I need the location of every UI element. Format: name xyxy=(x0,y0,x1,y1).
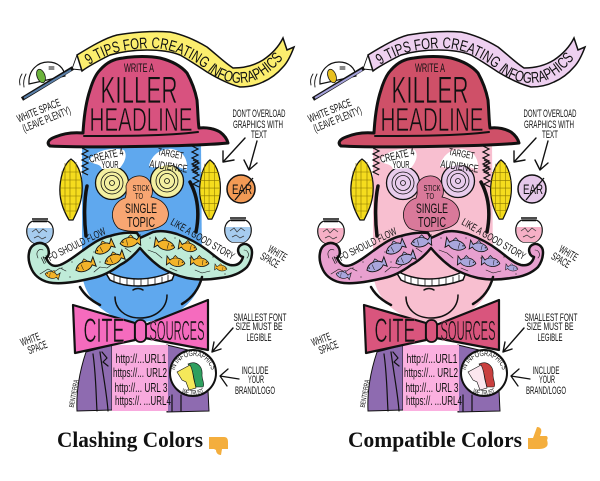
text: don't overload graphics: DON'T OVERLOAD xyxy=(232,108,286,120)
text: smallest font size: SMALLEST FONT xyxy=(234,312,287,324)
text: white space lower left: WHITE xyxy=(310,331,333,349)
icon: thumbs down xyxy=(209,437,228,455)
text: white space right: SPACE xyxy=(258,251,281,271)
shirt with urls: http://... URL 3 xyxy=(406,380,458,395)
icon: crossed out ear: EAR xyxy=(232,181,252,197)
arrow to logo xyxy=(511,369,530,386)
arrow to badge xyxy=(503,328,524,352)
icon: flying saucer xyxy=(311,55,373,99)
text: white space (leave plenty): (LEAVE PLENTY) xyxy=(312,105,364,135)
bow tie: cite sources: CITE xyxy=(84,312,124,350)
text: white space (leave plenty): WHITE SPACE xyxy=(306,97,353,125)
signature: BENTIERRA xyxy=(69,379,80,408)
chin xyxy=(406,288,458,318)
headline text: KILLER xyxy=(100,70,178,112)
eyes xyxy=(96,164,184,200)
shirt with urls: https://... URL2 xyxy=(113,365,167,380)
nose: stick to single topic: STICK xyxy=(132,184,150,193)
text: smallest font size xyxy=(234,312,287,344)
speech labels on forehead: AUDIENCE xyxy=(440,158,479,176)
text: white space (leave plenty) xyxy=(15,95,73,136)
arrows to ear xyxy=(223,138,257,170)
text: white space lower left: SPACE xyxy=(317,339,340,357)
text: don't overload graphics xyxy=(232,108,286,141)
text: don't overload graphics: TEXT xyxy=(251,129,267,141)
nose: stick to single topic: TO xyxy=(135,192,143,201)
text: don't overload graphics: TEXT xyxy=(542,129,558,141)
headline text: WRITE A xyxy=(124,61,154,75)
badge: in infographics we trust: WE TRUST xyxy=(474,388,494,395)
hat xyxy=(48,56,228,147)
caption: clashing colors: Clashing Colors xyxy=(57,427,203,452)
smile xyxy=(395,270,467,286)
nose: stick to single topic: SINGLE xyxy=(125,200,157,216)
text: include your brand/logo: YOUR xyxy=(539,374,555,386)
jaw outline xyxy=(371,277,493,305)
text: smallest font size: LEGIBLE xyxy=(538,332,562,344)
text: info should flow like a good story: INFO SHOULD FLOW xyxy=(331,226,399,267)
shirt with urls: https://. ...URL4 xyxy=(115,393,171,408)
text: smallest font size xyxy=(524,312,578,344)
headline text xyxy=(90,61,192,138)
text: info should flow like a good story: LIKE A GOOD STORY xyxy=(168,216,237,263)
text: info should flow like a good story xyxy=(331,216,528,267)
headline text: WRITE A xyxy=(415,61,445,75)
icon: fishbowls xyxy=(27,218,251,243)
badge: in infographics we trust xyxy=(460,349,508,397)
jacket xyxy=(77,345,209,412)
text: smallest font size: SIZE MUST BE xyxy=(236,321,282,333)
icon: corn ears xyxy=(60,159,220,220)
icon: crossed out ear xyxy=(227,175,255,203)
speech labels on forehead: CREATE 4 xyxy=(88,146,125,166)
speech labels on forehead: TARGET xyxy=(448,147,475,162)
jacket xyxy=(368,345,500,412)
shirt with urls: http://... URL 3 xyxy=(114,380,168,395)
text: smallest font size: LEGIBLE xyxy=(246,332,272,344)
text: white space lower left: SPACE xyxy=(26,339,49,357)
text: include your brand/logo xyxy=(526,365,566,397)
text: info should flow like a good story: INFO SHOULD FLOW xyxy=(40,226,108,267)
panel: clashing colors figure: SOURCES xyxy=(150,315,204,346)
nose: stick to single topic: TOPIC xyxy=(418,214,446,231)
text: include your brand/logo: INCLUDE xyxy=(532,365,560,377)
headline text: HEADLINE xyxy=(90,101,192,138)
headline text: KILLER xyxy=(392,70,468,112)
text: include your brand/logo: BRAND/LOGO xyxy=(235,385,275,397)
hair and sideburns xyxy=(373,146,490,236)
bow tie: cite sources: CITE xyxy=(374,312,416,350)
text: include your brand/logo: BRAND/LOGO xyxy=(526,385,566,397)
arrows to ear xyxy=(514,138,548,170)
text: don't overload graphics: GRAPHICS WITH xyxy=(233,119,283,131)
hat xyxy=(339,56,519,147)
speech labels on forehead xyxy=(379,146,479,176)
nose: stick to single topic: TO xyxy=(426,192,434,201)
nose: stick to single topic: SINGLE xyxy=(416,200,448,216)
icon: flying saucer xyxy=(20,55,82,99)
shirt with urls: https://. ...URL4 xyxy=(406,393,462,408)
banner: 9 tips: 9 TIPS FOR CREATING INFOGRAPHICS xyxy=(84,37,282,83)
text: white space (leave plenty) xyxy=(306,95,364,136)
text: info should flow like a good story: LIKE A GOOD STORY xyxy=(459,216,528,263)
text: white space right: WHITE xyxy=(557,243,580,264)
arrow to logo xyxy=(220,369,239,386)
badge: in infographics we trust: IN INFOGRAPHICS xyxy=(171,351,214,370)
icon: periwinkle fish xyxy=(335,233,519,280)
text: don't overload graphics xyxy=(524,108,577,141)
hair and sideburns xyxy=(82,146,199,236)
signature: BENTIERRA xyxy=(360,379,371,408)
nose: stick to single topic: TOPIC xyxy=(127,214,155,231)
text: white space right: SPACE xyxy=(549,251,572,271)
smile xyxy=(104,270,176,286)
icon: crossed out ear xyxy=(518,175,546,203)
bow tie: cite sources xyxy=(73,300,208,353)
text: white space lower left xyxy=(19,330,49,358)
icon: goldfish xyxy=(44,233,228,280)
speech labels on forehead: YOUR xyxy=(392,160,410,171)
headline text: HEADLINE xyxy=(380,101,484,138)
text: white space right xyxy=(549,242,580,273)
jaw outline xyxy=(80,277,202,305)
headline text xyxy=(380,61,484,138)
speech labels on forehead: CREATE 4 xyxy=(379,146,416,166)
text: white space (leave plenty): (LEAVE PLENTY) xyxy=(21,105,73,135)
icon: thumbs up xyxy=(528,427,548,449)
panel: compatible colors figure xyxy=(306,30,586,412)
text: white space lower left: WHITE xyxy=(19,331,42,349)
bow tie: cite sources xyxy=(364,300,499,353)
icon: fishbowls xyxy=(318,218,542,243)
speech labels on forehead: TARGET xyxy=(157,147,184,162)
shirt with urls: https://... URL2 xyxy=(404,365,458,380)
icon: corn ears xyxy=(351,159,511,220)
head xyxy=(373,140,493,322)
shirt with urls: http://...URL1 xyxy=(406,351,458,366)
speech labels on forehead: AUDIENCE xyxy=(149,158,188,176)
shirt with urls xyxy=(403,345,462,411)
text: white space lower left xyxy=(310,330,340,358)
badge: in infographics we trust: WE TRUST xyxy=(182,388,204,395)
nose: stick to single topic: STICK xyxy=(424,184,441,193)
speech labels on forehead xyxy=(88,146,188,176)
icon: crossed out ear: EAR xyxy=(523,181,543,197)
speech labels on forehead: YOUR xyxy=(102,160,118,171)
text: white space right: WHITE xyxy=(266,243,289,264)
text: include your brand/logo: INCLUDE xyxy=(242,365,268,377)
text: white space (leave plenty): WHITE SPACE xyxy=(15,97,62,125)
mustache xyxy=(29,231,252,283)
badge: in infographics we trust: IN INFOGRAPHICS xyxy=(462,351,505,370)
panel: compatible colors figure: SOURCES xyxy=(440,315,496,346)
nose: stick to single topic xyxy=(112,176,168,231)
badge: in infographics we trust xyxy=(169,349,217,397)
shirt with urls: http://...URL1 xyxy=(116,351,166,366)
eyes xyxy=(386,164,474,200)
text: white space right xyxy=(258,242,289,273)
chin xyxy=(115,288,167,318)
text: include your brand/logo: YOUR xyxy=(248,374,264,386)
panel: clashing colors figure xyxy=(15,30,296,412)
nose: stick to single topic xyxy=(403,176,459,231)
caption: compatible colors: Compatible Colors xyxy=(348,427,522,452)
mustache xyxy=(320,231,543,283)
banner: 9 tips: 9 TIPS FOR CREATING INFOGRAPHICS xyxy=(376,37,573,83)
shirt with urls xyxy=(112,345,171,411)
head xyxy=(82,140,202,322)
text: info should flow like a good story xyxy=(40,216,237,267)
text: include your brand/logo xyxy=(235,365,275,397)
arrow to badge xyxy=(212,328,233,352)
